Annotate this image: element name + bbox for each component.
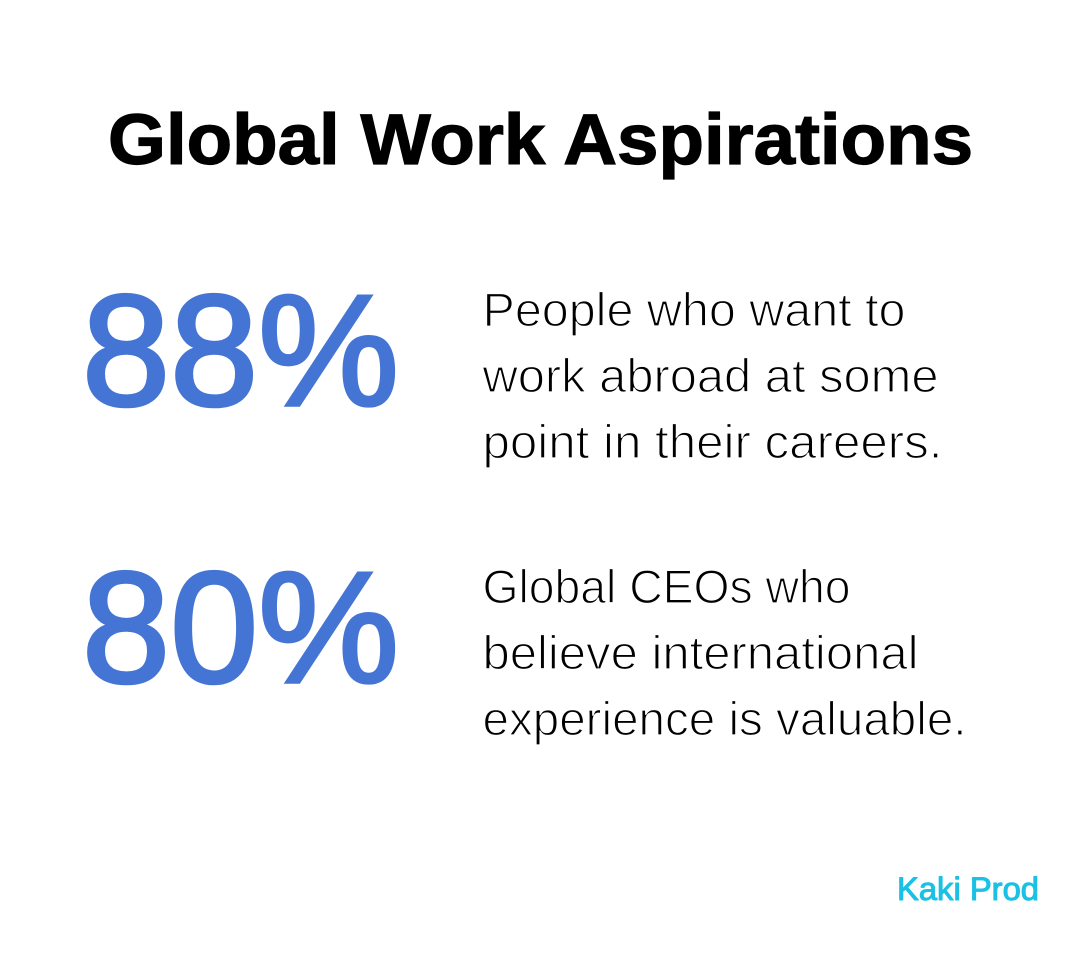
stat description: global CEOs: [482, 560, 966, 745]
stat value: 88%: 88%: [82, 263, 399, 439]
stat description: working abroad: work abroad at some: [481, 349, 938, 402]
stat description: working abroad: point in their careers.: [482, 415, 942, 468]
panel: stat 88%: [82, 263, 942, 468]
stat description: global CEOs: Global CEOs who: [482, 560, 850, 613]
title: Global Work Aspirations: [108, 101, 973, 180]
brand logo: Kaki Prod: [897, 871, 1039, 907]
stat description: global CEOs: experience is valuable.: [482, 692, 966, 745]
stat description: global CEOs: believe international: [482, 626, 918, 679]
stat description: working abroad: People who want to: [482, 283, 906, 336]
stat description: working abroad: [481, 283, 942, 468]
panel: stat 80%: [82, 540, 966, 745]
stat value: 80%: 80%: [82, 540, 399, 716]
